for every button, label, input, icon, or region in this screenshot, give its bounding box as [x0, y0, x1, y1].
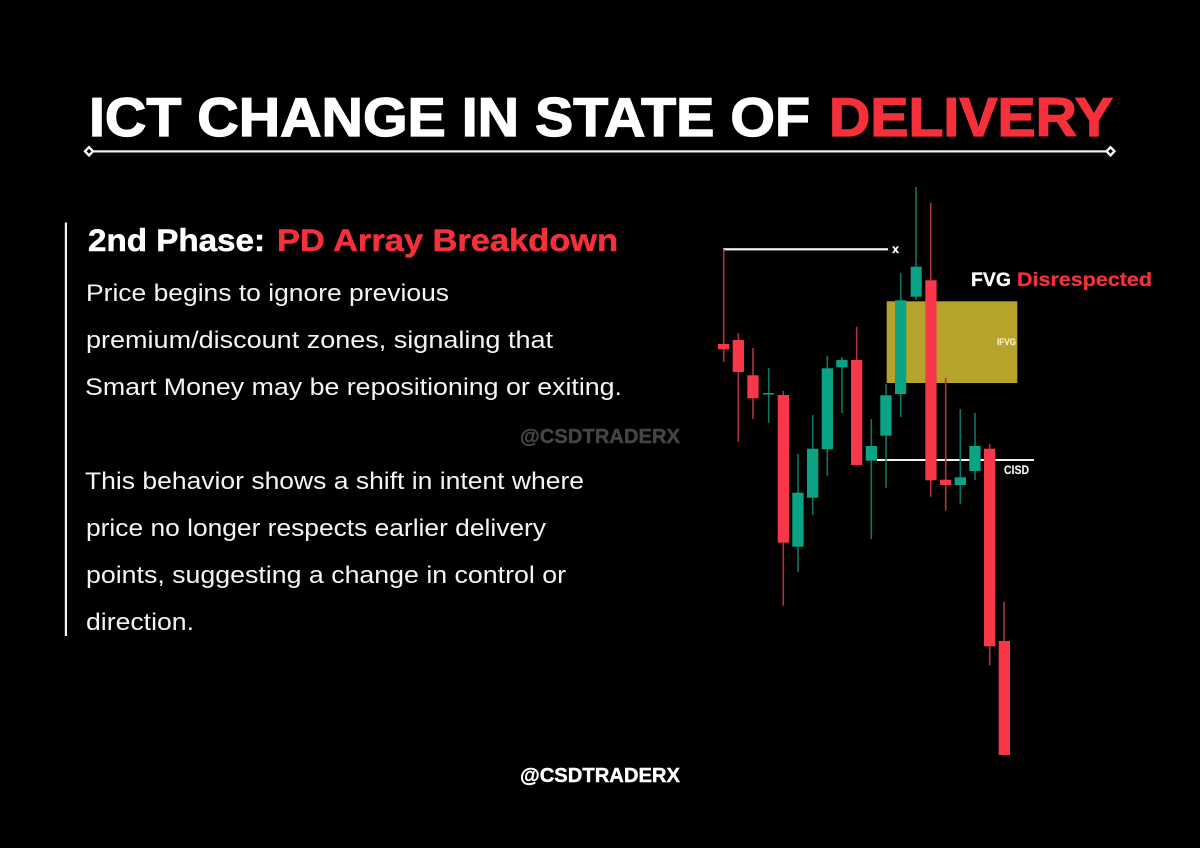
CISD line — [877, 459, 1034, 461]
chart: candlesticks — [718, 187, 1034, 755]
swing high line — [723, 248, 888, 250]
paragraph two: price no longer respects earlier delivery — [86, 515, 546, 542]
title underline — [85, 147, 1114, 155]
heading: 2nd phase: 2nd Phase: — [88, 222, 265, 258]
label: x: x — [892, 242, 899, 256]
title: DELIVERY — [829, 86, 1113, 148]
heading: 2nd phase: PD Array Breakdown — [277, 222, 618, 258]
wicks — [724, 187, 1004, 665]
title: ICT CHANGE IN STATE OF — [89, 86, 810, 148]
paragraph two — [85, 468, 584, 636]
heading: 2nd phase — [88, 222, 618, 258]
paragraph one: premium/discount zones, signaling that — [86, 327, 553, 354]
panel: explanation text — [65, 222, 622, 636]
watermark: @CSDTRADERX — [520, 426, 681, 448]
callout: FVG disrespected — [971, 269, 1152, 291]
title — [89, 86, 1113, 148]
callout: FVG disrespected: FVG — [971, 269, 1011, 291]
FVG zone — [887, 301, 1017, 383]
paragraph one — [85, 280, 622, 401]
paragraph one: Smart Money may be repositioning or exiting. — [85, 374, 622, 401]
label: IFVG: IFVG — [997, 337, 1016, 347]
paragraph one: Price begins to ignore previous — [86, 280, 449, 307]
candle bodies — [718, 267, 1010, 755]
vertical accent bar — [65, 222, 67, 636]
label: CISD: CISD — [1004, 465, 1029, 477]
paragraph two: points, suggesting a change in control or — [86, 562, 566, 589]
paragraph two: This behavior shows a shift in intent where — [85, 468, 584, 495]
footer handle: @CSDTRADERX — [520, 765, 681, 787]
callout: FVG disrespected: Disrespected — [1017, 269, 1152, 291]
paragraph two: direction. — [86, 609, 194, 636]
